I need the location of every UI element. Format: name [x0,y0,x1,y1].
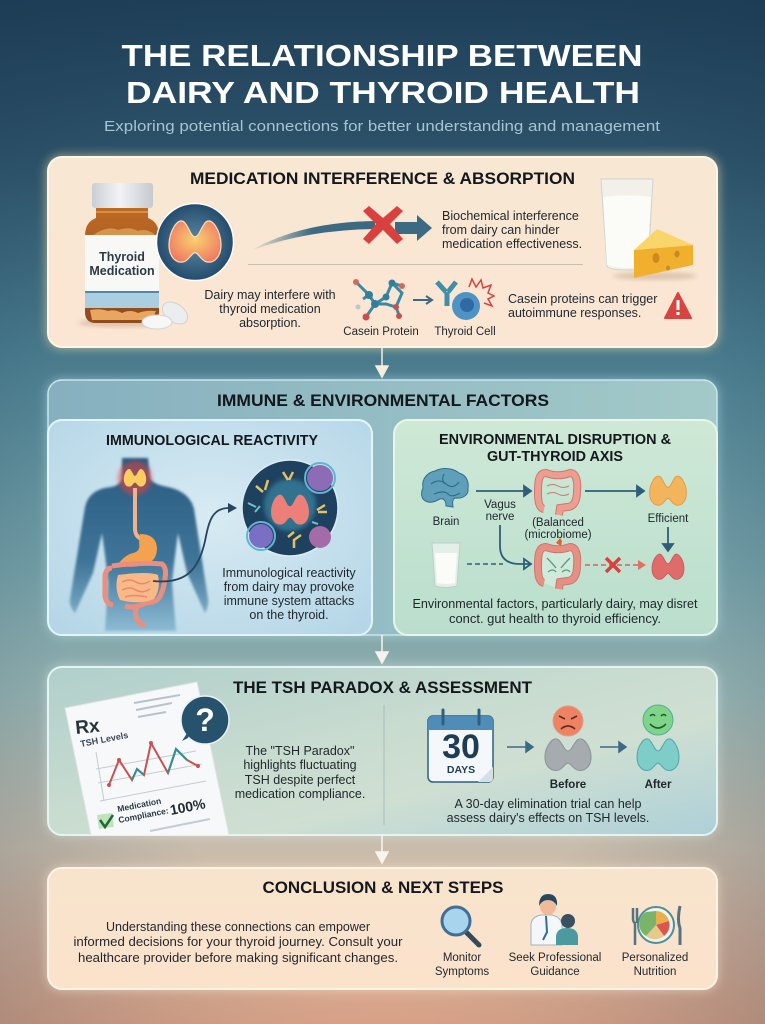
icon: thyroid in circle [156,204,234,280]
icon: milk glass and cheese [601,179,697,280]
arrow: casein to cell [413,296,432,304]
text: casein proteins [508,292,657,320]
text: immunological reactivity: Immunological reactivity [222,566,356,580]
text: immunological reactivity: immune system attacks [224,594,354,608]
text: biochemical interference: from dairy can hinder [442,223,559,237]
arrow: gut to thyroid circle [153,503,237,581]
icon: casein protein molecule [353,279,405,320]
text: biochemical interference: Biochemical interference [442,209,579,223]
panel: medication interference and absorption [46,155,719,349]
text: environmental factors [412,597,698,626]
heading: immunological reactivity: IMMUNOLOGICAL REACTIVITY [106,433,318,449]
icon: 30 day calendar [428,710,493,782]
icon: question bubble: ? [195,702,215,738]
icon: 30 day calendar: DAYS [447,764,475,776]
title: THE RELATIONSHIP BETWEEN [122,38,642,73]
icon: warning [665,293,691,318]
text: TSH paradox: The "TSH Paradox" [246,744,354,758]
heading: medication interference: MEDICATION INTERFERENCE & ABSORPTION [190,170,575,188]
illustration: lab report [65,682,230,840]
text: dairy may interfere [204,288,336,330]
illustration: immune cells attacking thyroid [242,460,338,556]
text: TSH paradox [235,744,365,801]
label: monitor symptoms [435,952,489,978]
label: personalized nutrition: Personalized [622,952,688,964]
text: immunological reactivity: on the thyroid. [249,608,329,622]
heading: environmental disruption: ENVIRONMENTAL DISRUPTION & [439,432,672,448]
text: elimination trial: assess dairy's effects on TSH levels. [447,811,649,825]
text: environmental factors: Environmental factors, particularly dairy, may disret [412,597,698,611]
illustration: lab report: Compliance: [117,805,170,825]
text: TSH paradox: TSH despite perfect [245,773,356,787]
text: biochemical interference [442,209,582,251]
text: dairy may interfere: absorption. [239,316,301,330]
icon: balanced gut [538,473,577,515]
label: personalized nutrition [622,952,688,978]
arrow: blocked path to thyroid [585,558,646,572]
icon: sad face [553,706,583,736]
label: vagus nerve [484,499,516,523]
title [122,38,642,110]
icon: happy face [643,705,673,735]
arrow: brain to gut [476,486,531,496]
text: environmental factors: conct. gut health to thyroid efficiency. [449,612,661,626]
label: vagus nerve: nerve [486,511,514,523]
arrow: before to after [600,742,626,752]
icon: medication bottle [78,183,192,329]
label: casein protein: Casein Protein [343,326,419,338]
text: elimination trial: A 30-day elimination trial can help [455,797,642,811]
text: elimination trial [447,797,649,825]
label: seek professional guidance: Guidance [530,966,580,978]
label: balanced microbiome: (microbiome) [524,529,592,541]
icon: 30 day calendar: 30 [442,728,480,766]
icon: doctor and patient [531,894,578,945]
arrow: panel 3 to panel 4 [376,835,388,863]
text: conclusion body [74,920,402,965]
label: efficient: Efficient [648,513,689,525]
icon: medication bottle: Thyroid [99,250,145,264]
heading: environmental disruption: GUT-THYROID AXIS [487,449,623,465]
arrow: panel 2 to panel 3 [376,635,388,663]
panel: immune and environmental factors [46,378,719,637]
arrow: calendar to before [507,742,533,752]
label: balanced microbiome [524,517,592,541]
icon: plate with fork and knife [633,906,680,945]
text: TSH paradox: highlights fluctuating [243,758,357,772]
icon: teal thyroid [637,739,679,770]
icon: magnifying glass [442,907,479,945]
arrow: gut to thyroid [585,486,644,496]
label: seek professional guidance: Seek Professional [509,952,601,964]
icon: antibody and thyroid cell [437,279,494,320]
label: seek professional guidance [509,952,601,978]
label: personalized nutrition: Nutrition [634,966,676,978]
arrow: vagus nerve to disrupted gut [500,525,531,569]
title: DAIRY AND THYROID HEALTH [126,75,640,110]
heading: TSH paradox: THE TSH PARADOX & ASSESSMENT [233,679,532,697]
arrow: panel 1 to panel 2 [376,347,388,377]
text: dairy may interfere: thyroid medication [219,302,321,316]
text: immunological reactivity [222,566,356,622]
icon: question bubble [181,696,229,744]
divider [383,705,385,825]
subtitle: Exploring potential connections for better understanding and management [104,118,661,135]
label: monitor symptoms: Symptoms [435,966,489,978]
text: casein proteins: Casein proteins can trigger [508,292,657,306]
illustration: lab report: Medication [116,796,162,814]
label: balanced microbiome: (Balanced [532,517,584,529]
text: dairy may interfere: Dairy may interfere with [204,288,336,302]
icon: healthy thyroid [650,476,686,505]
icon: glass of milk [432,543,460,588]
text: conclusion body: healthcare provider before making significant changes. [78,951,398,965]
label: after: After [645,779,672,791]
panel: environmental disruption and gut-thyroid axis [394,420,717,635]
arrow: dashed milk line [467,563,503,565]
heading: immune and environmental: IMMUNE & ENVIRONMENTAL FACTORS [217,392,549,410]
icon: inflamed thyroid [652,554,684,579]
arrow: down to red thyroid [663,527,673,551]
illustration: human torso with gut [70,458,208,631]
heading: conclusion: CONCLUSION & NEXT STEPS [262,879,504,897]
divider [248,264,583,266]
arrow: blocked absorption [250,206,432,251]
panel: immunological reactivity [48,420,372,635]
icon: brain [422,469,468,507]
panel: conclusion and next steps [46,866,719,991]
text: TSH paradox: medication compliance. [235,787,365,801]
label: brain: Brain [433,516,459,528]
text: conclusion body: Understanding these connections can empower [106,920,370,934]
icon: grey thyroid [545,739,591,770]
illustration: lab report: 100% [169,795,207,818]
text: immunological reactivity: from dairy may provoke [224,580,354,594]
illustration: lab report: TSH Levels [79,730,129,749]
label: monitor symptoms: Monitor [443,952,481,964]
heading: environmental disruption [439,432,672,465]
text: biochemical interference: medication effectiveness. [442,237,582,251]
label: before: Before [550,779,586,791]
text: conclusion body: informed decisions for your thyroid journey. Consult your [74,935,402,949]
illustration: lab report: Rx [74,716,101,739]
label: vagus nerve: Vagus [484,499,516,511]
panel: TSH paradox and assessment [46,665,719,840]
icon: medication bottle: Medication [89,264,155,278]
label: thyroid cell: Thyroid Cell [434,326,496,338]
icon: disrupted gut [538,538,577,589]
text: casein proteins: autoimmune responses. [508,306,641,320]
